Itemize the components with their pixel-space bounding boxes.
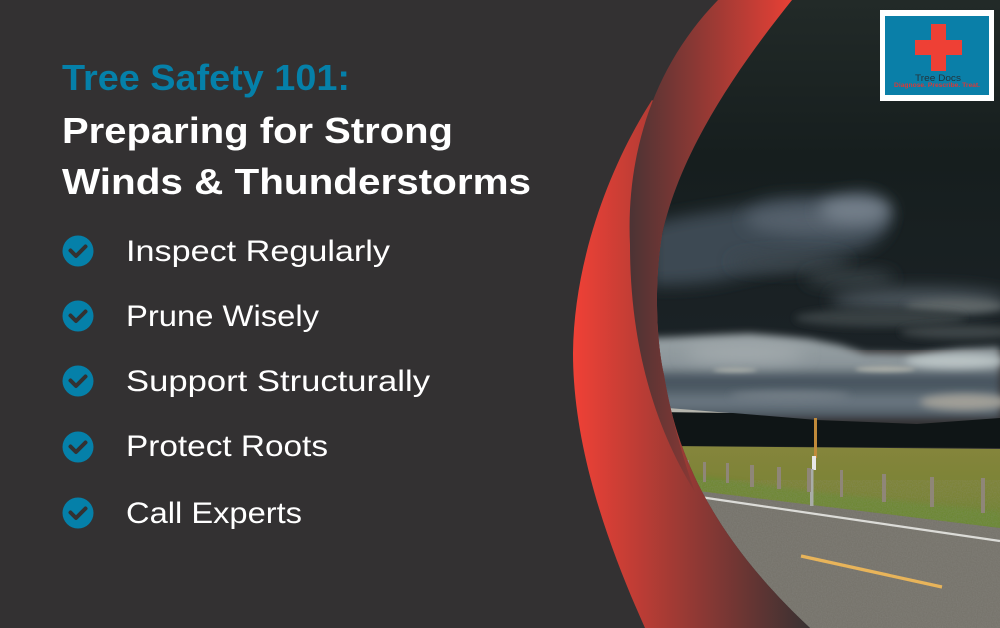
item: support structurally: Support Structurally [126, 365, 430, 398]
item: call experts: Call Experts [126, 497, 302, 530]
logo frame [880, 10, 994, 101]
item: prune wisely: Prune Wisely [126, 300, 319, 333]
item: protect roots: Protect Roots [126, 430, 328, 463]
white edge line [700, 497, 1000, 541]
lower bright sky [650, 334, 1000, 418]
dark tree line on the horizon [660, 412, 1000, 448]
title line 2: Preparing for Strong [62, 110, 453, 151]
logo blue field [885, 16, 989, 95]
utility marker post [810, 418, 817, 506]
title [62, 57, 531, 202]
dark upper sky with storm clouds [640, 0, 1000, 350]
dark red curved band [630, 0, 792, 492]
grass verge [694, 475, 893, 504]
asphalt road [690, 490, 1000, 628]
item: prune wisely [62, 300, 319, 333]
logo tagline: Diagnose. Prescribe. Treat. [894, 83, 980, 89]
road grain [690, 490, 1000, 628]
title line 1: Tree Safety 101: [62, 57, 350, 98]
green field [660, 446, 1000, 530]
item: call experts [62, 497, 302, 530]
item: inspect regularly: Inspect Regularly [126, 235, 390, 268]
logo red cross [915, 24, 962, 71]
yellow centre line [801, 556, 942, 587]
checklist [62, 235, 430, 530]
title line 3: Winds & Thunderstorms [62, 161, 531, 202]
bright red curved band [573, 100, 810, 628]
item: protect roots [62, 430, 328, 463]
logo name: Tree Docs [915, 73, 962, 83]
photo: storm clouds over a road and field [640, 0, 1000, 628]
fence posts [686, 460, 985, 513]
logo [880, 10, 994, 101]
